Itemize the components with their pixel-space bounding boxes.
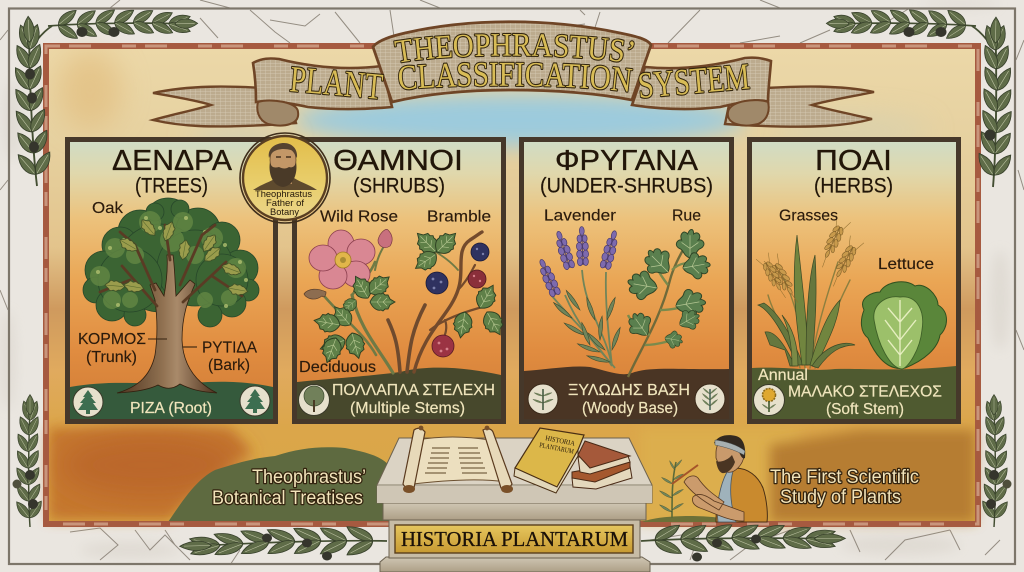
pedestal: slab [377, 438, 652, 503]
caption: first scientific study [770, 467, 919, 508]
medallion text: Theophrastus [255, 189, 312, 200]
banner ribbon [148, 20, 874, 128]
panel: Phrygana (under-shrubs) [522, 140, 732, 422]
label: trunk [78, 331, 167, 366]
label: lavender: Lavender [544, 208, 617, 224]
lavender [535, 226, 622, 368]
rue [623, 230, 712, 377]
label: rue: Rue [672, 208, 701, 224]
medallion text: Botany [270, 207, 299, 218]
fresco panel [46, 46, 978, 524]
label: root: ΡΙΖΑ (Root) [130, 400, 212, 417]
olive branch: lower left side [12, 395, 45, 527]
olive branch: upper right side [974, 17, 1017, 187]
ribbon: right band [632, 58, 771, 109]
label: bark: ΡΥΤΙΔΑ [202, 340, 257, 356]
label: multiple stems: ΠΟΛΛΑΠΛΑ ΣΤΕΛΕΧΗ [332, 382, 495, 399]
grasses [756, 216, 864, 368]
ribbon: centre [373, 22, 651, 102]
label: bark [183, 340, 257, 374]
oak tree illustration [83, 198, 259, 393]
heading: ΔΕΝΔΡΑ [112, 145, 233, 177]
icon: sprig left [528, 384, 558, 414]
lettuce [861, 282, 946, 369]
ribbon: folds [257, 100, 769, 126]
reed pen [672, 465, 698, 484]
label: lettuce: Lettuce [878, 256, 934, 273]
label: soft stem: (Soft Stem) [826, 401, 904, 418]
small plant [642, 459, 735, 522]
red books [572, 441, 632, 489]
label: bark: (Bark) [208, 357, 250, 374]
pedestal: block [389, 519, 640, 558]
subheading: (UNDER-SHRUBS) [540, 174, 713, 198]
headband [715, 440, 745, 455]
title line 1: THEOPHRASTUS’ [393, 32, 635, 64]
caption: treatises: Theophrastus’ [252, 467, 366, 488]
sky patch [295, 94, 745, 146]
caption: first scientific study: The First Scientific [770, 467, 919, 488]
lower wash: gold centre [640, 428, 800, 522]
label: deciduous: Deciduous [299, 359, 376, 376]
hair [714, 435, 745, 458]
rose leaves [313, 270, 395, 366]
olive branch: top left [37, 5, 198, 43]
tunic [716, 468, 767, 522]
gold book: HISTORIA [545, 434, 576, 448]
gold book [514, 428, 584, 493]
lower wash: green hill [168, 447, 392, 522]
himation [717, 471, 736, 522]
label: woody base [568, 382, 690, 417]
subheading: (TREES) [135, 174, 208, 198]
plaque: HISTORIA PLANTARUM [401, 527, 628, 551]
heading: ΦΡΥΓΑΝΑ [555, 145, 699, 177]
wild rose [304, 229, 392, 299]
label: woody base: (Woody Base) [582, 400, 678, 417]
label: multiple stems [332, 382, 495, 417]
olive branch: bottom left [179, 522, 388, 563]
lower wash: rust left [49, 428, 252, 520]
icon: round tree [298, 384, 330, 416]
pedestal: base [380, 557, 650, 572]
caption: first scientific study: Study of Plants [780, 487, 901, 508]
label: soft stem [788, 384, 942, 418]
label: multiple stems: (Multiple Stems) [350, 400, 465, 417]
pedestal [377, 438, 652, 572]
panel: Poai (herbs) [750, 140, 958, 422]
caption: treatises [212, 467, 366, 509]
label: trunk: (Trunk) [86, 349, 137, 366]
label: grasses: Grasses [779, 208, 838, 224]
label: trunk: ΚΟΡΜΟΣ [78, 331, 146, 348]
ribbon: right tail [725, 87, 874, 127]
shrub stems [325, 232, 490, 373]
medallion: Theophrastus [240, 133, 330, 223]
title: plant: PLANT [288, 59, 384, 108]
panel: Dendra (trees) [68, 140, 276, 422]
label: bramble: Bramble [427, 208, 491, 226]
icon: sprig right [695, 384, 725, 414]
ground [297, 368, 501, 419]
lower wash: rust right [770, 430, 975, 522]
heading: ΠΟΑΙ [815, 145, 892, 177]
gold book: PLANTARUM [539, 441, 575, 456]
subheading: (HERBS) [814, 174, 893, 198]
olive branch: lower right side [979, 395, 1012, 527]
scribe figure [672, 435, 767, 522]
icon: fir right [240, 386, 270, 416]
ground [752, 366, 956, 419]
label: soft stem: ΜΑΛΑΚΟ ΣΤΕΛΕΧΟΣ [788, 384, 942, 400]
bramble leaves [410, 227, 508, 339]
medallion text [255, 189, 312, 218]
icon: flower [754, 384, 784, 416]
trunk [117, 255, 217, 393]
ground [524, 367, 729, 419]
ribbon: left band [253, 58, 392, 109]
blackberries [426, 243, 489, 357]
pedestal: neck [383, 503, 646, 520]
title: system: SYSTEM [636, 56, 751, 107]
branches [100, 225, 242, 306]
subheading: (SHRUBS) [353, 174, 445, 198]
olive branch: bottom right [641, 519, 846, 562]
icon: fir left [73, 387, 103, 417]
label: wild rose: Wild Rose [320, 208, 398, 226]
label: oak: Oak [92, 200, 124, 217]
side washes [58, 50, 930, 150]
olive branch: top right [826, 5, 987, 43]
title line 2: CLASSIFICATION [398, 62, 634, 93]
arms [684, 476, 744, 521]
caption: treatises: Botanical Treatises [212, 488, 363, 509]
head [716, 438, 744, 472]
ribbon: left tail [153, 87, 296, 126]
label: woody base: ΞΥΛΩΔΗΣ ΒΑΣΗ [568, 382, 690, 399]
panel: Thamnoi (shrubs) [294, 140, 508, 422]
ground [70, 382, 273, 419]
olive branch: upper left side [7, 15, 56, 187]
beard [716, 455, 735, 473]
open scroll [403, 426, 513, 493]
heading: ΘΑΜΝΟΙ [333, 145, 463, 177]
label: annual: Annual [758, 367, 808, 384]
portrait [253, 143, 317, 190]
medallion text: Father of [266, 198, 304, 209]
